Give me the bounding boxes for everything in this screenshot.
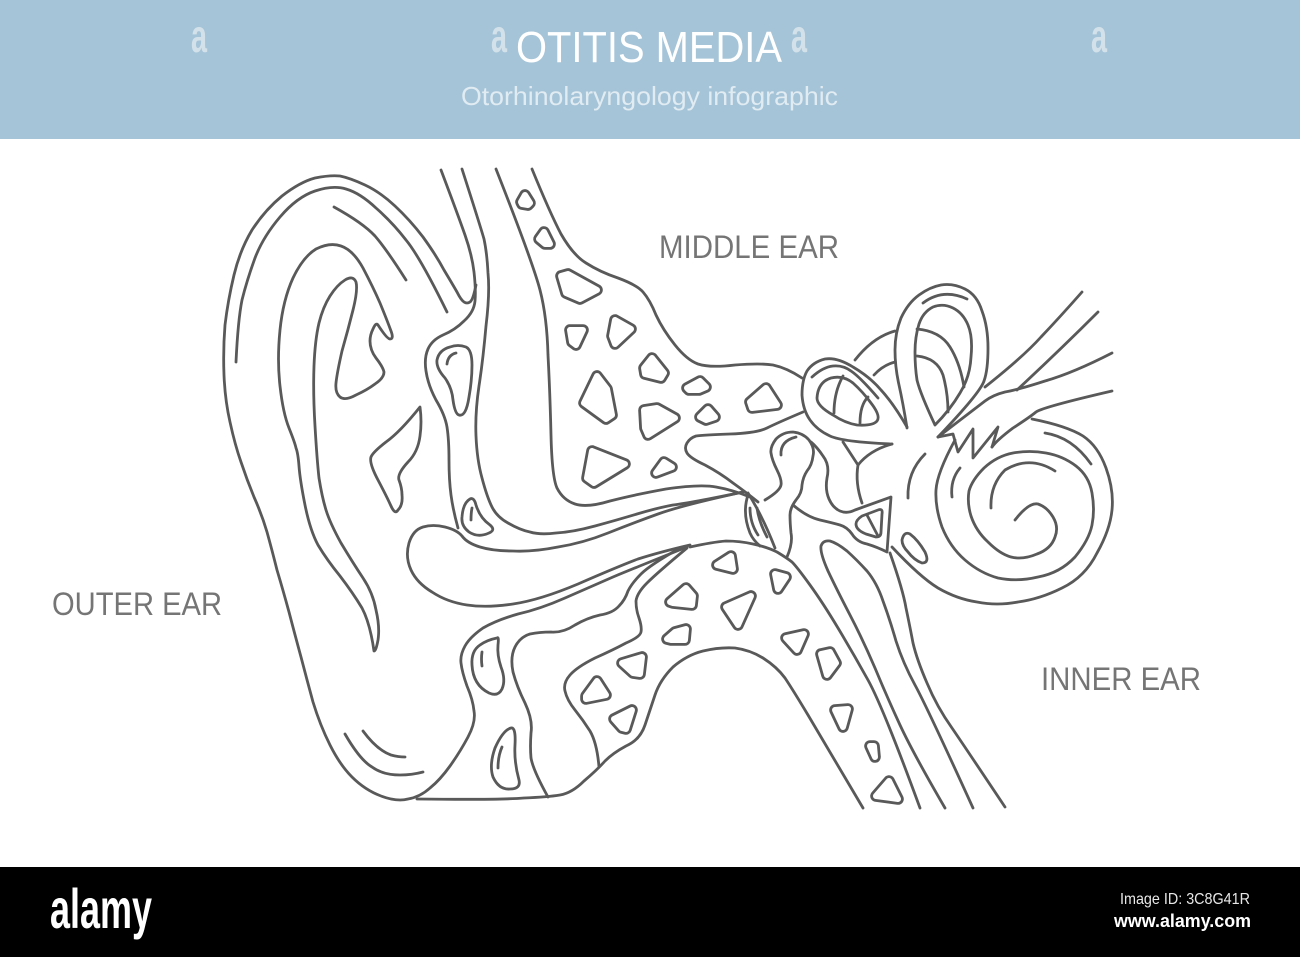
label: middle ear: MIDDLE EAR xyxy=(659,229,839,265)
header banner: a xyxy=(791,10,807,62)
ear anatomy diagram xyxy=(224,169,1112,808)
label: inner ear: INNER EAR xyxy=(1041,661,1201,697)
subtitle: Otorhinolaryngology infographic xyxy=(461,81,838,111)
label: outer ear: OUTER EAR xyxy=(52,586,222,622)
ear canal xyxy=(407,169,743,606)
cochlea xyxy=(892,419,1112,604)
tragus and cartilage xyxy=(425,170,493,535)
title: OTITIS MEDIA xyxy=(516,23,783,72)
eardrum and ossicles xyxy=(686,412,891,557)
header banner: a xyxy=(1091,10,1107,62)
header banner: a xyxy=(491,10,507,62)
header banner xyxy=(0,0,1300,139)
website: www.alamy.com xyxy=(1113,911,1251,931)
outer ear: auricle and helix xyxy=(224,176,687,800)
header banner: a xyxy=(191,10,207,62)
temporal bone walls xyxy=(417,169,920,808)
eustachian tube xyxy=(821,541,1005,808)
bone air cells: lower temporal xyxy=(586,556,898,799)
image id: Image ID: 3C8G41R xyxy=(1120,891,1250,908)
auditory nerve xyxy=(938,292,1112,458)
semicircular canals xyxy=(802,284,988,503)
logo: alamy xyxy=(50,877,152,940)
bone air cells: upper mastoid xyxy=(521,195,777,483)
footer bar xyxy=(0,867,1300,957)
